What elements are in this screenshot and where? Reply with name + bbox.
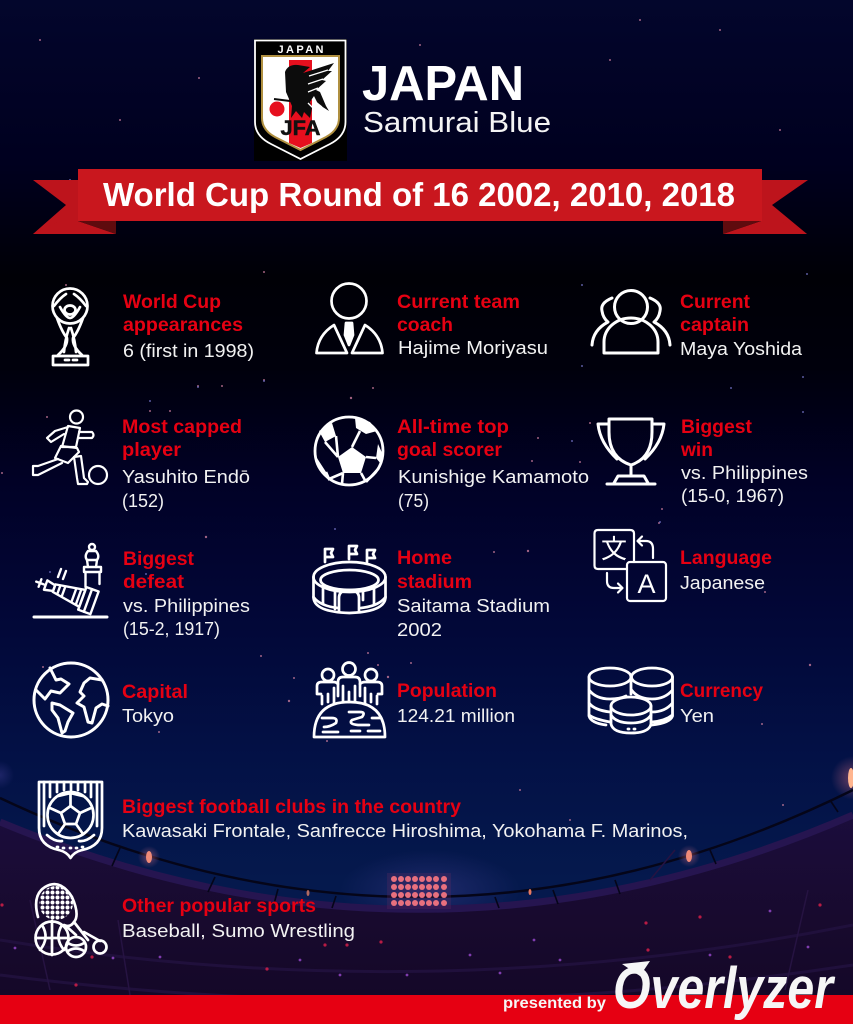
text: Home stadium: 2002 <box>397 619 442 640</box>
panel: Home stadium <box>314 546 550 640</box>
panel: Capital <box>34 663 188 737</box>
text: Current captain: Current <box>680 292 751 313</box>
panel: Population <box>314 662 515 737</box>
text: Current captain: captain <box>680 315 749 336</box>
text: Current team coach: Hajime Moriyasu <box>398 337 548 358</box>
text: World Cup appearances: appearances <box>123 315 243 336</box>
text: Most capped player: player <box>122 440 182 461</box>
crest: JFA badge: JAPAN <box>278 44 324 56</box>
icon: football <box>315 417 383 485</box>
title: JAPAN: JAPAN <box>362 57 524 111</box>
text: Biggest defeat <box>123 549 250 639</box>
text: World Cup appearances: 6 (first in 1998) <box>123 340 254 361</box>
panel: Biggest win <box>598 417 808 506</box>
text: Currency: Yen <box>680 705 714 726</box>
panel: Most capped player <box>33 410 250 511</box>
text: Biggest defeat: Biggest <box>123 549 195 570</box>
icon: club shield with ball <box>39 782 102 858</box>
text: All-time top goal scorer: All-time top <box>397 417 509 438</box>
icon: globe <box>34 663 108 737</box>
text: Current team coach <box>397 292 548 358</box>
footer: presented by Overlyzer: presented by <box>503 995 606 1012</box>
panel: Biggest defeat <box>32 544 250 639</box>
icon: coach <box>316 284 382 353</box>
text: Population <box>397 681 515 726</box>
icon: trophy cup <box>598 419 664 484</box>
text: All-time top goal scorer: (75) <box>398 490 429 511</box>
text: Capital: Capital <box>122 682 188 703</box>
text: Current team coach: coach <box>397 315 453 336</box>
icon: translate: 文 <box>601 534 627 564</box>
text: World Cup appearances <box>123 292 254 361</box>
panel: Current captain <box>592 290 803 359</box>
icon: translate: A <box>637 569 656 599</box>
text: Biggest football clubs: Biggest football clubs in the country <box>122 797 461 818</box>
ribbon banner: World Cup Round of 16 2002, 2010, 2018 <box>103 176 735 213</box>
icon: translate <box>594 530 666 601</box>
icon: world cup trophy <box>52 288 88 365</box>
text: Population: 124.21 million <box>397 705 515 726</box>
text: World Cup appearances: World Cup <box>123 292 221 313</box>
text: All-time top goal scorer: Kunishige Kamamoto <box>398 466 589 487</box>
stadium backdrop <box>0 756 853 1024</box>
text: All-time top goal scorer: goal scorer <box>397 440 503 461</box>
ribbon banner <box>33 169 808 234</box>
text: Biggest win: (15-0, 1967) <box>681 485 784 506</box>
footer: presented by Overlyzer <box>503 956 836 1021</box>
floodlight <box>387 873 451 909</box>
text: Currency: Currency <box>680 681 763 702</box>
panel: All-time top goal scorer <box>315 417 589 511</box>
text: Current team coach: Current team <box>397 292 520 313</box>
text: Currency <box>680 681 763 726</box>
panel: Currency <box>589 668 763 733</box>
subtitle: Samurai Blue: Samurai Blue <box>363 107 551 139</box>
text: Most capped player <box>122 417 250 511</box>
text: Biggest win: win <box>680 440 713 461</box>
text: Most capped player: Most capped <box>122 417 242 438</box>
panel: Current team coach <box>316 284 548 358</box>
text: Home stadium: Home <box>397 548 452 569</box>
footer bar <box>0 995 853 1024</box>
text: Biggest football clubs: Kawasaki Frontale, Sanfrecce Hiroshima, Yokohama F. Marinos, <box>122 820 688 841</box>
text: Current captain: Maya Yoshida <box>680 338 803 359</box>
text: Other popular sports: Baseball, Sumo Wrestling <box>122 920 355 941</box>
text: Population: Population <box>397 681 497 702</box>
text: Other popular sports: Other popular sports <box>122 896 316 917</box>
text: Home stadium: Saitama Stadium <box>397 595 550 616</box>
panel: Other popular sports <box>36 884 355 957</box>
panel: World Cup appearances <box>52 288 254 365</box>
text: Biggest win: Biggest <box>681 417 753 438</box>
text: Biggest win <box>680 417 808 506</box>
text: Most capped player: (152) <box>122 490 164 511</box>
text: Biggest defeat: (15-2, 1917) <box>123 618 220 639</box>
icon: captain group <box>592 290 670 353</box>
panel: Biggest football clubs <box>39 782 688 858</box>
text: Current captain <box>680 292 803 359</box>
text: Most capped player: Yasuhito Endō <box>122 466 250 487</box>
text: Language <box>680 548 772 593</box>
icon: footballer kicking <box>33 410 107 484</box>
text: Capital: Tokyo <box>122 705 174 726</box>
text: Home stadium <box>397 548 550 640</box>
icon: coin stacks <box>589 668 672 733</box>
crest: JFA badge: JFA <box>280 117 320 140</box>
icon: people on globe <box>314 662 385 737</box>
text: All-time top goal scorer <box>397 417 589 511</box>
text: Capital <box>122 682 188 726</box>
panel: Language <box>594 530 772 601</box>
text: Biggest defeat: defeat <box>123 572 185 593</box>
crest: JFA badge <box>254 39 347 161</box>
icon: stadium <box>314 546 386 613</box>
text: Language: Japanese <box>680 572 765 593</box>
text: Home stadium: stadium <box>397 572 472 593</box>
text: Biggest football clubs <box>122 797 688 841</box>
icon: fallen chess king <box>32 544 107 617</box>
icon: sports equipment <box>36 884 106 957</box>
text: Biggest defeat: vs. Philippines <box>123 595 250 616</box>
text: Language: Language <box>680 548 772 569</box>
text: Other popular sports <box>122 896 355 941</box>
text: Biggest win: vs. Philippines <box>681 462 808 483</box>
